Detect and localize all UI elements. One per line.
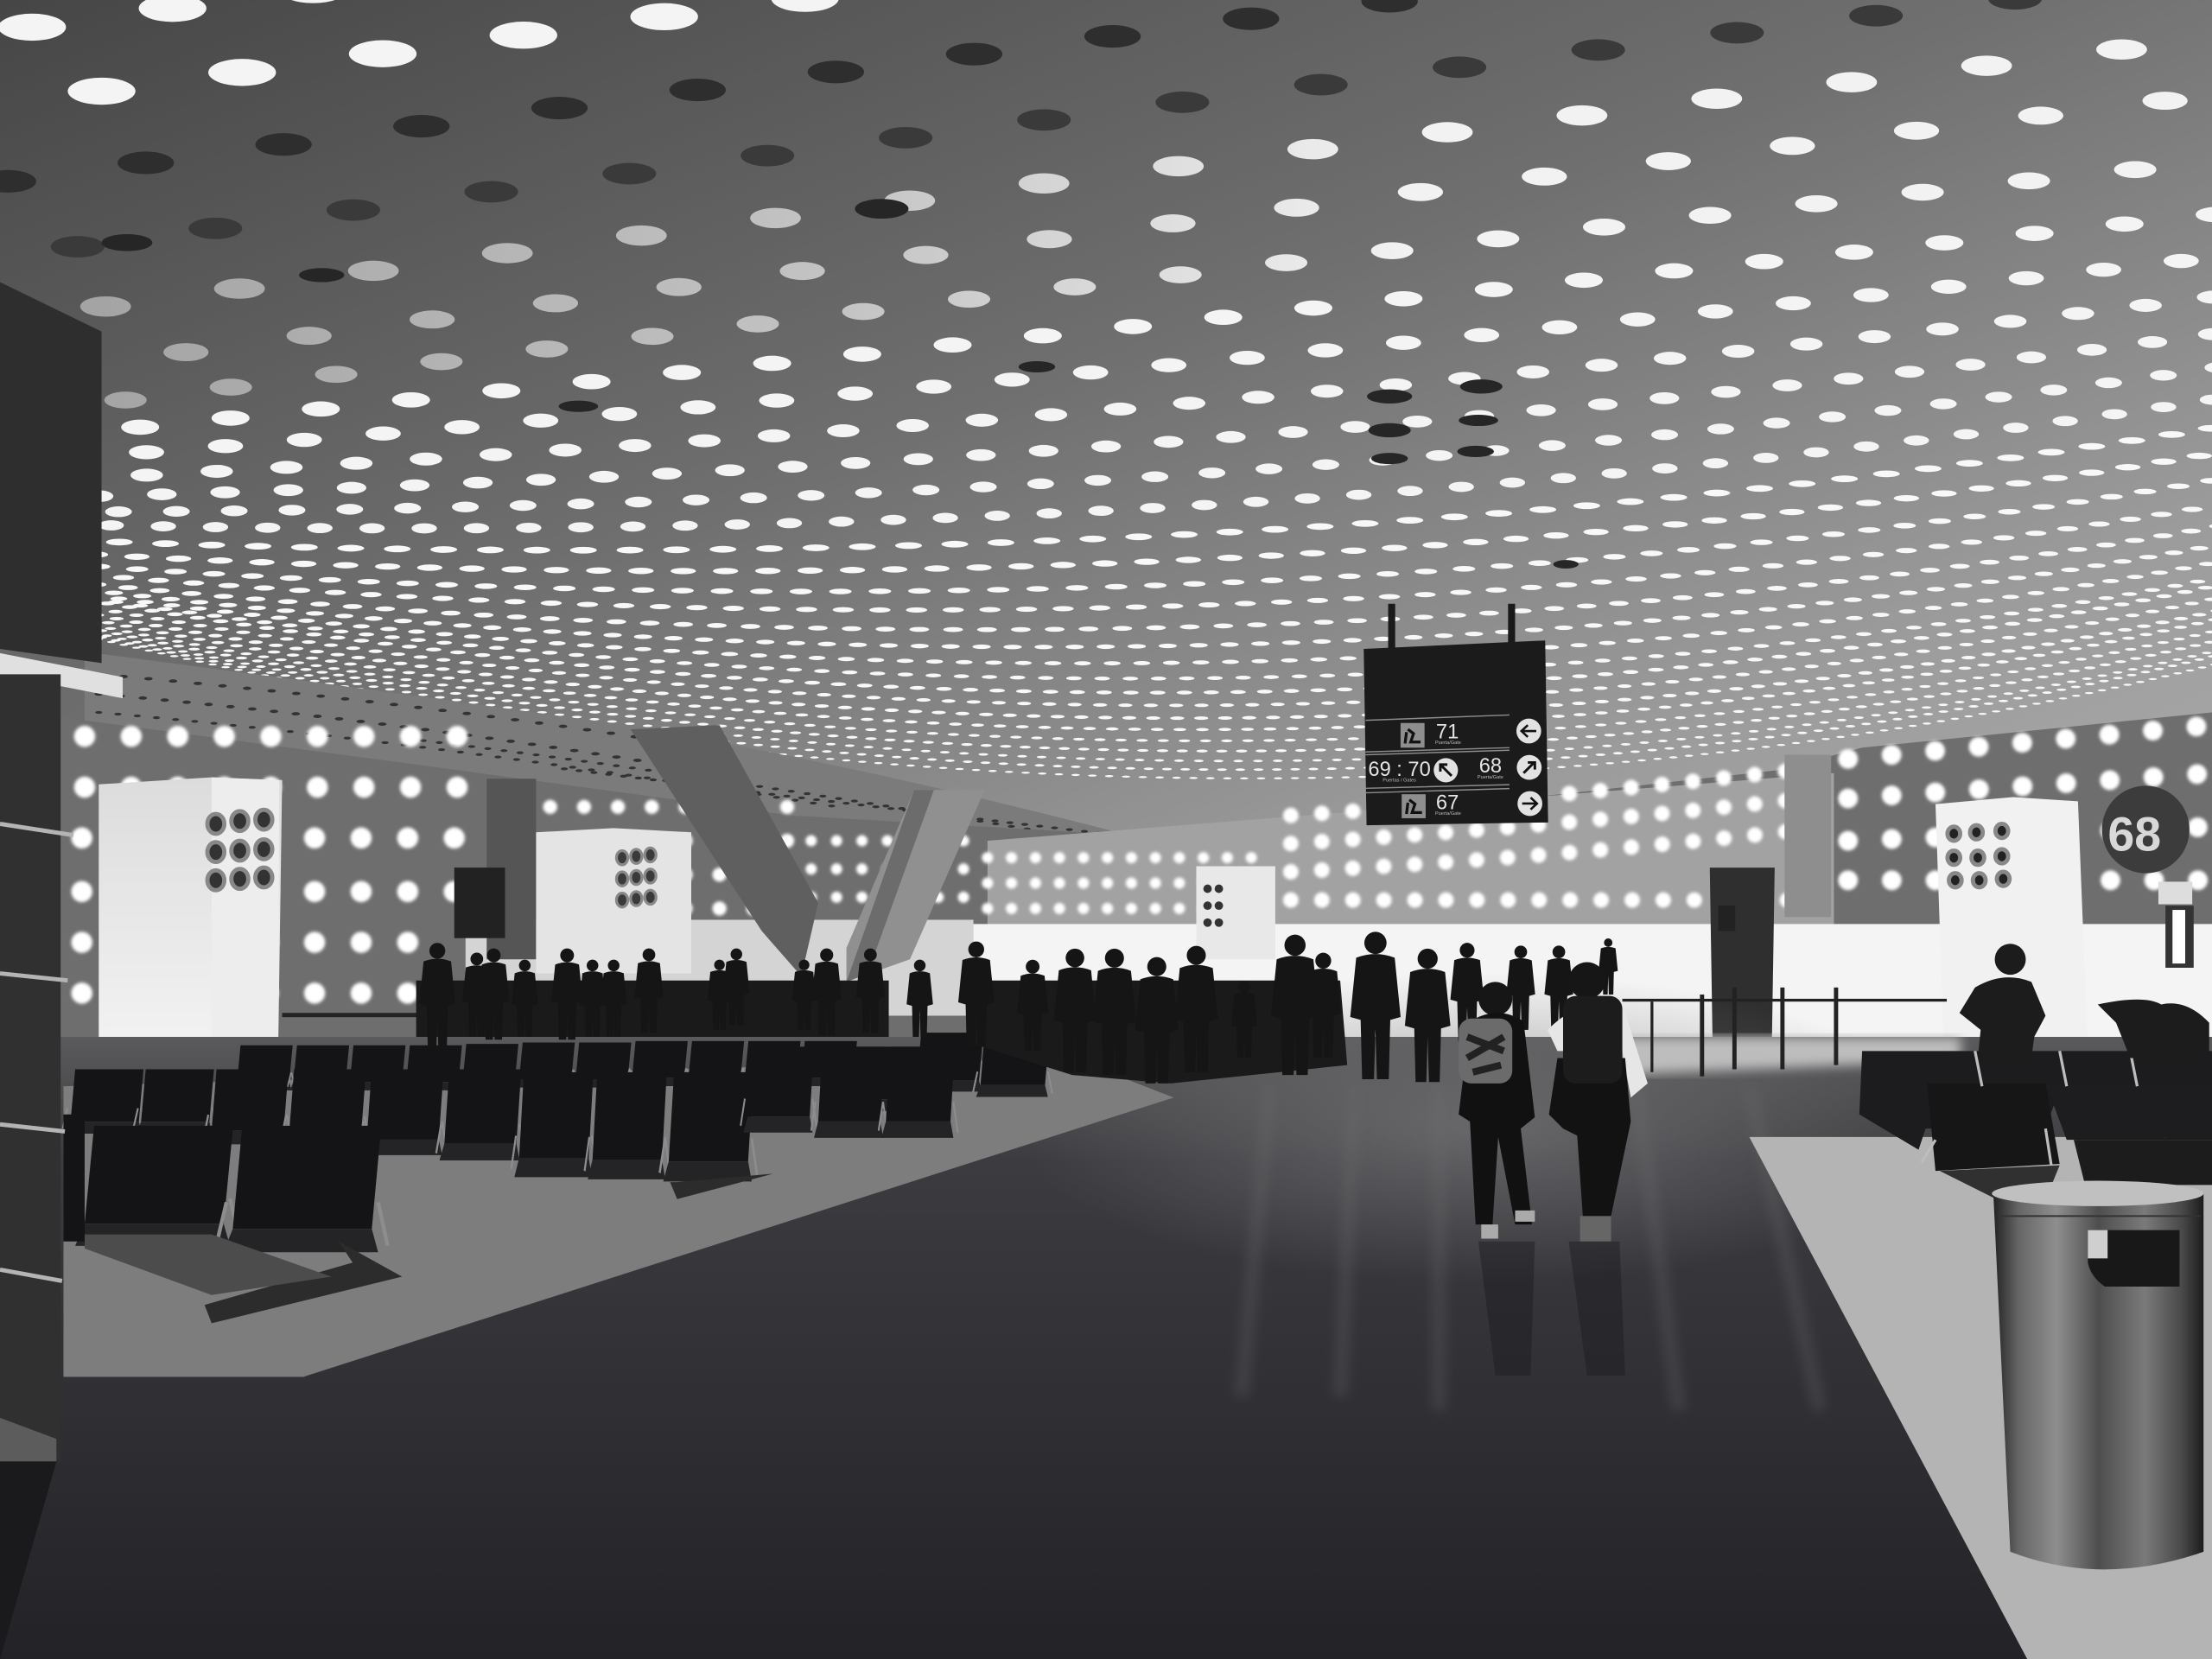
sign row: gates 69, 70 and 68: Puerta/Gate bbox=[1478, 775, 1503, 780]
diagonal V columns bbox=[631, 725, 985, 982]
stainless waste bin bbox=[1992, 1181, 2203, 1569]
column: left bbox=[99, 778, 283, 1068]
sign row: gate 71: 71 bbox=[1436, 721, 1459, 744]
left foreground pillar bbox=[0, 283, 123, 1659]
sign row: gate 67: Puerta/Gate bbox=[1435, 811, 1461, 817]
sign row: gates 69, 70 and 68: 68 bbox=[1479, 755, 1502, 778]
ceiling lights: upper rows bbox=[0, 0, 2212, 528]
sign row: gate 71: Puerta/Gate bbox=[1435, 741, 1461, 746]
back walls with round lights bbox=[56, 712, 2212, 1072]
woman standing bbox=[1960, 944, 2045, 1058]
white columns with vents bbox=[99, 778, 2088, 1068]
unlit dark ceiling cluster bbox=[102, 199, 1579, 569]
light carpet: right bbox=[1749, 1137, 2212, 1659]
man with arms behind head bbox=[2098, 1000, 2209, 1058]
column: right bbox=[1936, 797, 2088, 1051]
ceiling lights: lower rows bbox=[0, 423, 2212, 779]
sign row: gates 69, 70 and 68 bbox=[1368, 755, 1541, 783]
gate 68 round sign: 68 bbox=[2107, 807, 2161, 861]
traveller: left bbox=[1459, 982, 1535, 1238]
overhead gate sign bbox=[1363, 604, 1548, 825]
seats right bbox=[1859, 1051, 2212, 1235]
waiting passengers on right bbox=[1960, 944, 2209, 1058]
column: middle bbox=[536, 828, 691, 974]
crowd of silhouettes bbox=[416, 931, 1618, 1084]
sign row: gates 69, 70 and 68: 69 : 70 bbox=[1368, 759, 1431, 781]
light carpet: seating area left bbox=[63, 1058, 1173, 1376]
sign row: gate 67: 67 bbox=[1436, 791, 1459, 814]
two travellers with backpacks bbox=[1459, 962, 1648, 1376]
sign row: gate 67 bbox=[1402, 791, 1542, 818]
traveller: right bbox=[1548, 962, 1648, 1242]
sign row: gate 71 bbox=[1401, 719, 1541, 747]
shaded ceiling edge on the left bbox=[85, 652, 1128, 836]
bright glazing band bbox=[974, 924, 2212, 1051]
sign row: gates 69, 70 and 68: Puertas / Gates bbox=[1382, 778, 1416, 783]
crowd mass bbox=[416, 981, 1347, 1084]
floor bbox=[0, 974, 2212, 1659]
ceiling bbox=[0, 0, 2212, 874]
seats left bbox=[63, 1033, 1052, 1323]
concrete pier bbox=[1784, 754, 1831, 917]
glazing glow on floor bbox=[1608, 1037, 1961, 1075]
stanchions and kiosks bbox=[283, 868, 1947, 1077]
column: distant bbox=[1196, 866, 1275, 959]
wall lights bbox=[82, 725, 2212, 993]
traveller reflections bbox=[1478, 1242, 1625, 1376]
gate 68 round sign bbox=[2102, 785, 2194, 968]
floor reflections bbox=[1016, 974, 1947, 1284]
